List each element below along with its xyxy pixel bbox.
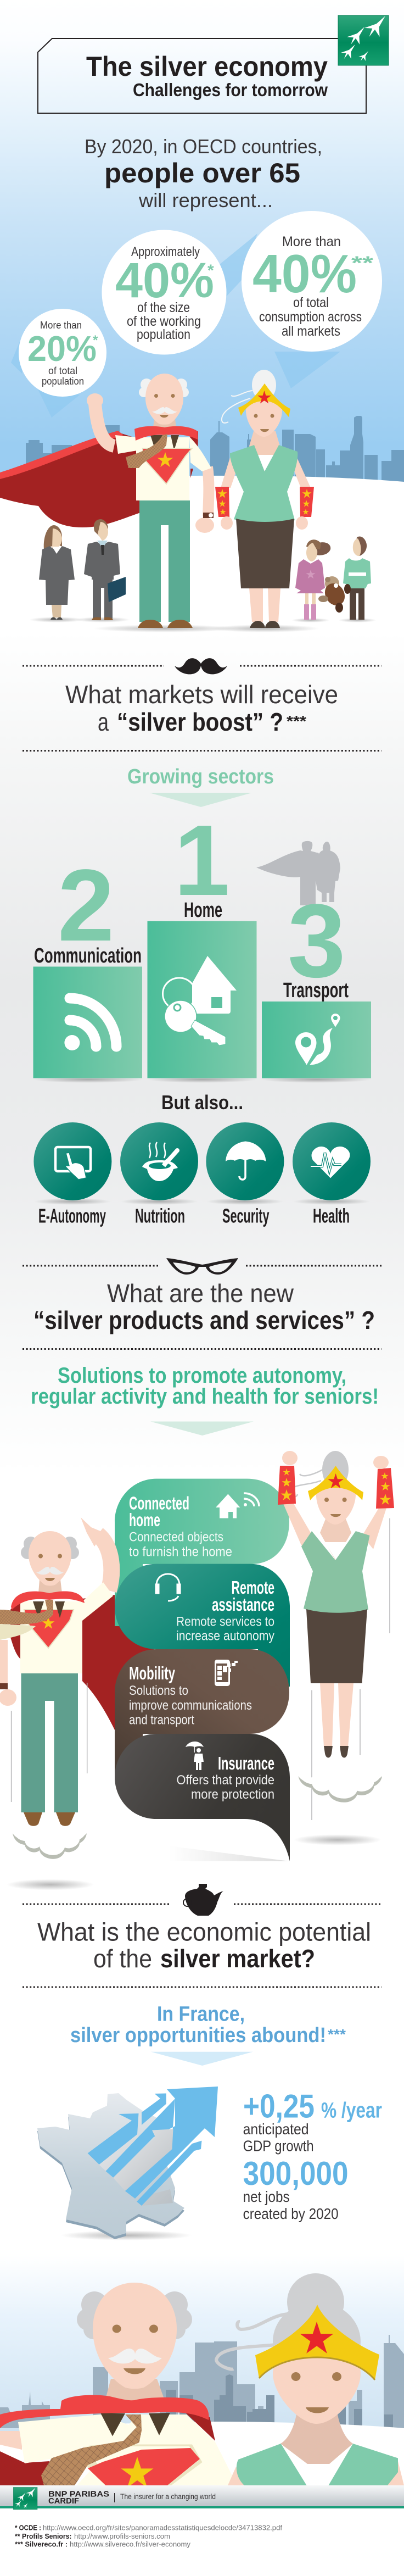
bubble: connected home: to furnish the home [129,1545,232,1559]
sector: security [206,1122,284,1227]
tie [126,434,167,468]
face [152,394,177,418]
numeral 3: 3 [288,883,346,999]
footnotes: ** Profils Seniors: [15,2532,71,2540]
label: transport: Transport [283,979,349,1002]
intro text: will represent... [138,189,273,212]
stat bubble: 20% of population: population [42,376,84,387]
neck [280,2414,353,2464]
heading: economic potential: What is the economic potential [37,1918,371,1946]
icon: headset [156,1574,180,1601]
loose hair strands [222,391,252,423]
icon: phone [215,1660,238,1686]
bubble: mobility: improve communications [129,1698,252,1713]
mouth [306,2407,329,2413]
footnotes: *** Silvereco.fr : [15,2540,68,2549]
subheading: in France [70,2003,346,2047]
light rays behind stat bubbles [11,233,340,418]
illustration: business woman [39,525,75,620]
face [36,1554,64,1581]
stat bubble: 40% consumption: all markets [282,324,340,339]
background: snowy hill [0,476,404,640]
stats: France: created by 2020 [243,2205,339,2222]
collar points [33,1601,65,1618]
arrow thin [137,2141,202,2206]
map of France [37,2093,184,2239]
green top [237,2444,398,2485]
stat bubble: 20% of population: 20% [27,329,97,369]
arrow C large [105,2087,218,2199]
heading: silver boost [65,680,338,736]
bubble: remote assistance: Remote services to [176,1614,274,1629]
neck [104,2379,166,2403]
trousers [21,1673,78,1812]
brand name: BNP PARIBAS [48,2490,109,2499]
shoes [250,621,280,628]
other sectors row [33,1122,371,1227]
illustration: superhero woman [215,370,314,628]
footnotes [15,2524,282,2549]
stat bubble: 40% consumption: consumption across [259,309,362,325]
bubble: connected home [115,1479,289,1626]
stat bubble: 40% consumption [242,211,382,352]
stat bubble: 40% consumption: More than [282,234,341,249]
stat bubble: 40% working population: Approximately [131,244,200,259]
stats: France: 300,000 [243,2155,349,2192]
shadow [294,1834,381,1845]
icon: BNP logo small [13,2488,37,2510]
sector: e-autonomy: E-Autonomy [38,1205,106,1227]
raised arm [87,393,114,446]
shoes [24,1812,75,1826]
tiara [255,2305,379,2380]
bubble: remote assistance: assistance [212,1594,274,1615]
lower arm and watch [195,467,214,533]
skirt [236,519,294,588]
icon: heart pulse [311,1147,350,1178]
numeral 1: 1 [174,804,230,916]
tagline: The insurer for a changing world [120,2492,216,2501]
background: sky [0,0,404,494]
icon: glasses [166,1258,238,1275]
shoes [138,620,193,628]
bubble: insurance: more protection [191,1787,274,1802]
heading: silver boost: a [98,708,109,736]
white inner top [296,2464,340,2485]
podium block 1 [147,921,257,1078]
heading: economic potential: silver market? [160,1944,315,1973]
cape [0,431,198,527]
legs [249,588,280,622]
icon: tablet [55,1147,91,1179]
illustration: portrait woman [216,2273,404,2485]
emblem [24,1610,74,1648]
banner bar [0,2485,404,2506]
background: footer sky [0,2255,404,2489]
illustration: teddy bear [318,576,351,613]
stat bubble: 40% consumption: 40% [252,243,357,304]
bubble: mobility: and transport [129,1713,194,1727]
white top inner [254,455,275,471]
heading: silver products: What are the new [107,1279,294,1308]
numeral 2: 2 [58,849,114,962]
icon: route pins [295,1014,340,1065]
shoes [324,1746,349,1758]
arrow B [142,2093,166,2125]
icon: house and key [162,956,237,1045]
chest emblem [143,448,192,484]
speed lines [12,1683,87,1802]
podium shadows [33,1076,371,1083]
heading: silver boost: What markets will receive [65,680,338,709]
neck [38,1579,62,1593]
subheading: in France: In France, [157,2003,245,2026]
hair [139,379,189,397]
sector: e-autonomy [33,1122,111,1227]
arms [221,458,311,488]
skirt [306,1609,367,1683]
bubble: insurance: Insurance [218,1753,274,1773]
label: communication: Communication [34,944,142,967]
podium block 3 [262,1002,371,1078]
hair strand [291,1470,323,1496]
collar points [150,435,179,450]
icon: soup bowl [142,1142,178,1181]
wristbands and fists [278,1451,394,1509]
stat bubble: 40% working population [102,230,226,355]
footer banner [0,2485,404,2510]
shirt [115,435,211,500]
stats: France: anticipated [243,2121,309,2138]
hair bun [252,370,276,400]
footer banner: CARDIF [48,2497,79,2506]
tiara [308,1466,363,1500]
sector: health: Health [313,1205,350,1227]
bubble: connected home: Connected objects [129,1530,223,1545]
stats: France: +0,25 [243,2088,315,2125]
icon: moustache [175,658,227,674]
neck [320,1519,351,1560]
face [254,414,274,432]
red cape behind bubbles [10,1590,154,1730]
intro text: people over 65 [104,158,300,188]
stat bubble: 20% of population: More than [40,320,82,331]
header: logo and title [38,15,389,113]
subheading: solutions: Solutions to promote autonomy, [58,1364,346,1388]
stat bubble: 40% working population: population [137,327,190,342]
illustration: girl with teddy [295,539,330,620]
arrow: down 3 [151,2052,253,2066]
legs [320,1683,354,1747]
speed lines [312,1518,390,1820]
head [29,1531,71,1585]
stat bubble: 40% consumption: ** [351,253,374,274]
cloud [13,1829,87,1859]
heading: silver products [33,1279,375,1334]
background: grey section [0,632,404,1478]
shadow [60,2230,192,2240]
stat bubble: 40% working population: 40% [115,253,214,308]
left sleeve and arm [0,1624,36,1706]
sector: health [293,1122,371,1227]
head [145,374,183,425]
illustration: flying man [0,1531,113,1890]
ground shadows [29,617,377,632]
hair bun [322,1451,349,1488]
illustration: portrait man [0,2283,237,2488]
stats: France: net jobs [243,2188,290,2205]
hair [21,1537,79,1559]
head [316,1485,356,1525]
skyline: bottom city [0,2335,404,2428]
icon: man with umbrella [186,1742,204,1770]
bubble: insurance: Offers that provide [177,1773,274,1788]
bubble: remote assistance: Remote [232,1577,274,1598]
stats: France: GDP growth [243,2138,314,2155]
hair [273,2273,361,2381]
cape collar [0,2395,209,2428]
bubble: remote assistance: increase autonomy [176,1628,274,1644]
label: home: Home [184,899,222,922]
icon: BNP logo [338,15,389,65]
illustration: superhero man [0,374,214,628]
green top [230,445,298,524]
heading: economic potential: of the [93,1944,152,1973]
arms [228,2461,404,2485]
bubble: remote assistance [115,1564,290,1687]
dark cape [0,2413,215,2485]
green top [301,1531,370,1614]
tie [0,1600,53,1624]
hair strands [216,2314,288,2369]
shirt sleeve [18,2414,135,2463]
green rule [0,2506,404,2508]
bubble: connected home: Connected [129,1493,189,1513]
subheading: but also: But also... [161,1091,243,1114]
subheading: solutions [31,1364,379,1409]
cape collar [11,1591,85,1610]
stat bubble: 20% of population: * [93,333,98,348]
stats: France [243,2088,382,2222]
neck [153,415,177,431]
cloud [299,1772,382,1802]
arrow: down 2 [150,1422,254,1436]
shirt [20,1582,113,1673]
stat bubble: 40% working population: * [207,262,214,280]
bubble: mobility [115,1649,289,1780]
stats: France: % /year [321,2099,382,2123]
skin arm [0,2431,22,2450]
legs [139,500,190,622]
stat bubble: 20% of population: of total [48,365,77,376]
shadow [7,1879,94,1890]
intro text [85,135,322,212]
sector: nutrition [120,1122,198,1227]
head [93,2283,177,2389]
icon: connected house [216,1493,259,1518]
eyes [113,2325,158,2333]
subheading: growing sectors: Growing sectors [127,765,274,788]
footnotes: http://www.profils-seniors.com [74,2532,170,2540]
arrow grey [113,2129,173,2191]
moustache [108,2349,162,2363]
neck [249,431,280,483]
heading: silver boost: *** [287,713,306,730]
title: The silver economy [86,51,328,82]
illustration: business man [84,519,126,620]
skyline: top city [26,416,404,489]
stat bubble: 40% consumption: of total [293,295,329,310]
stat bubble: 40% working population: of the working [127,314,201,329]
sector: nutrition: Nutrition [135,1205,185,1227]
stat bubble: 20% of population [19,309,106,397]
stat bubble: 40% working population: of the size [137,300,190,315]
intro text: By 2020, in OECD countries, [85,135,322,158]
head [273,2357,361,2424]
icon: rss [64,998,116,1050]
bubble: mobility: Mobility [129,1663,175,1683]
arrow A [88,2113,138,2165]
footnotes: * OCDE : [15,2524,41,2532]
arrow shadows [99,2134,173,2206]
face [324,1498,347,1517]
hair [77,2291,192,2339]
subheading: in France: *** [328,2026,346,2043]
subheading: in France: silver opportunities abound! [70,2024,326,2047]
tie [41,2414,142,2485]
tiara [238,383,290,417]
mouth [124,2368,145,2374]
heading: silver boost: “silver boost” ? [117,708,283,736]
sector: security: Security [222,1205,269,1227]
illustration: boy [343,536,371,620]
bubble: insurance [115,1734,290,1861]
white inner [325,1542,347,1560]
bubble: mobility: Solutions to [129,1683,188,1698]
icon: teapot [183,1884,223,1916]
chest emblem [82,2445,202,2488]
shirt body [77,2414,237,2485]
podium block 2 [33,967,142,1078]
subtitle: Challenges for tomorrow [133,80,328,100]
eyes [291,2372,341,2381]
man raised arm [81,1517,111,1590]
wristbands and fists [215,487,314,530]
heading: economic potential [37,1918,371,1973]
illustration: flying woman [278,1451,394,1845]
arrow: down 1 [149,793,252,807]
podium chart [33,804,371,1083]
title box [38,38,366,113]
icon: umbrella [226,1142,266,1179]
background: footer hill [0,2422,404,2485]
head [246,401,282,437]
silhouette superheroes [256,841,340,905]
footnotes: http://www.silvereco.fr/silver-economy [70,2540,191,2549]
footnotes: http://www.oecd.org/fr/sites/panoramadesstatistiquesdelocde/34713832.pdf [43,2524,282,2532]
collar points [100,2413,170,2436]
arms [283,1504,386,1549]
illustration: France map with arrows [37,2087,218,2240]
bubble: connected home: home [129,1510,160,1530]
cape collar [134,426,198,441]
